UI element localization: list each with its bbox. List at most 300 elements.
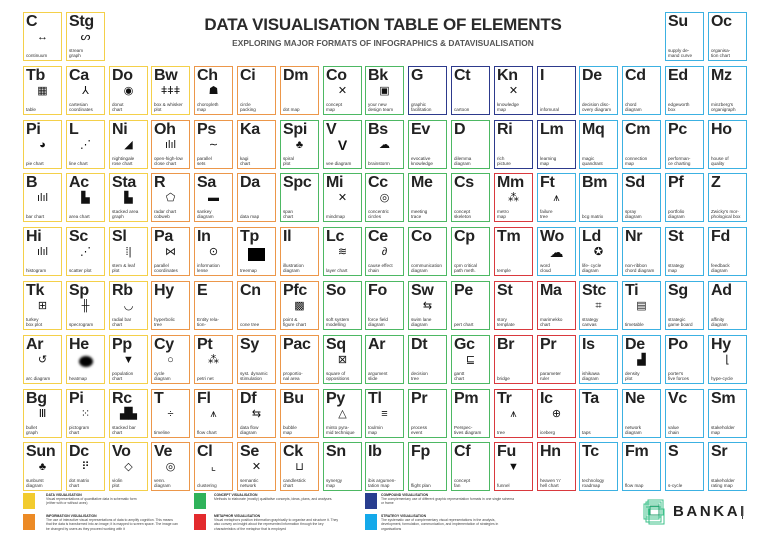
cell: Z <box>708 173 747 222</box>
cell: Sta: graph <box>112 214 124 219</box>
cell: Cn <box>237 281 276 330</box>
cell: Sr: Sr <box>711 443 727 460</box>
cell: Cn: cone tree <box>240 322 259 327</box>
cell: G <box>408 66 447 115</box>
cell: Sm: map <box>711 430 720 435</box>
cell: Fl: flow chart <box>197 430 217 435</box>
cell: Cf: Cf <box>454 443 470 460</box>
legend: strategy: development, formulation, communication, and implementation of strategies in <box>381 522 498 526</box>
cell: Bs: ☁ <box>379 139 390 151</box>
cell: Ic <box>537 389 576 438</box>
cell: Pfc: point & <box>283 317 297 322</box>
cell: Hy2 <box>708 335 747 384</box>
cell: Ta: taps <box>582 430 591 435</box>
cell: Ct: cartoon <box>454 107 469 112</box>
cell: T <box>151 389 190 438</box>
cell: Ma: marimekko <box>540 317 562 322</box>
cell: R <box>151 173 190 222</box>
cell: Df <box>237 389 276 438</box>
cell: Ad <box>708 281 747 330</box>
cell: Me: Me <box>411 174 433 191</box>
cell: Ta: Ta <box>582 390 599 407</box>
cell: Pt: ⁂ <box>208 354 219 366</box>
cell: Ar <box>23 335 62 384</box>
cell: Z: phological box <box>711 214 740 219</box>
cell: Bu: bubble <box>283 425 297 430</box>
cell: Hi: ılıl <box>37 246 48 258</box>
legend: compound <box>365 493 514 509</box>
cell: Co: concept <box>326 102 342 107</box>
cell: So <box>323 281 362 330</box>
cell: Ka: kagi <box>240 156 248 161</box>
cell: Df: Df <box>240 390 256 407</box>
cell: Ft: tree <box>540 214 548 219</box>
cell: S: s-cycle <box>668 483 682 488</box>
cell: Z: Z <box>711 174 720 191</box>
cell: Pfc: figure chart <box>283 322 306 327</box>
cell: Ne <box>622 389 661 438</box>
cell: Kn: ✕ <box>509 85 518 97</box>
cell: Wo: word <box>540 263 550 268</box>
cell: Dc: chart <box>69 483 79 488</box>
cell: Wo: cloud <box>540 268 551 273</box>
legend: data: DATA VISUALISATION <box>46 493 82 497</box>
cell: Ri: rich <box>497 156 504 161</box>
cell: Co: Co <box>326 67 347 84</box>
cell: St2: template <box>497 322 515 327</box>
cell: Pa: parallel <box>154 263 169 268</box>
cell: Sw: swim lane <box>411 317 431 322</box>
cell: Ci <box>237 66 276 115</box>
cell: Se: Se <box>240 443 259 460</box>
cell: Mz: organigraph <box>711 107 736 112</box>
cell: Da: data map <box>240 214 259 219</box>
cell: Dc: Dc <box>69 443 89 460</box>
cell: Pi: Pi <box>26 121 41 138</box>
cell: C: ↔ <box>37 31 48 43</box>
cell: St2: St <box>497 282 512 299</box>
cell: Ib: ibis argumen- <box>368 478 396 483</box>
cell: Ma: Ma <box>540 282 562 299</box>
cell: Sun: sunburst <box>26 478 44 483</box>
cell: He: He <box>69 336 89 353</box>
cell: Sl: Sl <box>112 228 127 245</box>
cell: Stg: Stg <box>69 13 94 30</box>
cell: Sc: ⋰ <box>80 246 91 258</box>
cell: Po: five forces <box>668 376 689 381</box>
cell: Ch: choropleth <box>197 102 218 107</box>
cell: Ni <box>109 120 148 169</box>
cell: Lm: map <box>540 161 549 166</box>
cell: Sc: Sc <box>69 228 88 245</box>
cell: Ck: Ck <box>283 443 303 460</box>
cell: Stg: ᔕ <box>81 31 90 43</box>
cell: Hy2: Hy <box>711 336 731 353</box>
cell: Tb <box>23 66 62 115</box>
cell: Pt <box>194 335 233 384</box>
cell: Sm <box>708 389 747 438</box>
cell: Dt <box>408 335 447 384</box>
cell: Mi: mindmap <box>326 214 345 219</box>
cell: Pac: nal area <box>283 376 300 381</box>
cell: Pi <box>23 120 62 169</box>
cell: Sta: Sta <box>112 174 136 191</box>
cell: Pi2: pictogram <box>69 425 89 430</box>
cell: Cy: ○ <box>167 354 174 366</box>
cell: Me: meeting <box>411 209 427 214</box>
cell: Cc: concentric <box>368 209 389 214</box>
cell: Tr: ⩚ <box>510 408 517 420</box>
cell: Spi: ♣ <box>296 139 303 151</box>
cell: Ac <box>66 173 105 222</box>
cell: Pf: portfolio <box>668 209 684 214</box>
cell: Hy: Hy <box>154 282 174 299</box>
cell: Fl <box>194 389 233 438</box>
cell: In <box>194 227 233 276</box>
cell: B: B <box>26 174 37 191</box>
cell: Oc <box>708 12 747 61</box>
cell: Spc <box>280 173 319 222</box>
cell: Ve: ◎ <box>166 461 175 473</box>
cell: Ic: Ic <box>540 390 553 407</box>
cell: E: tion- <box>197 322 206 327</box>
cell: Su <box>665 12 704 61</box>
cell: Tk: ⊞ <box>38 300 47 312</box>
cell: Ti: timetable <box>625 322 644 327</box>
legend: metaphor: METAPHOR VISUALISATION <box>214 514 260 518</box>
cell: L: L <box>69 121 78 138</box>
cell: Is: diagram <box>582 376 599 381</box>
cell: Cc: Cc <box>368 174 388 191</box>
cell: Fd: feedback <box>711 263 730 268</box>
cell: Fm <box>622 442 661 491</box>
cell: Br: bridge <box>497 376 510 381</box>
cell: Bk: your new <box>368 102 387 107</box>
cell: Ve: venn. <box>154 478 165 483</box>
legend: data: Visual representations of quantitative data in schematic form <box>46 497 137 501</box>
cell: E: Entity rela- <box>197 317 219 322</box>
cell: Pac: proportio- <box>283 371 303 376</box>
cell: Nr: chord diagram <box>625 268 654 273</box>
cell: Mm <box>494 173 533 222</box>
cell: Ev <box>408 120 447 169</box>
cell: St <box>665 227 704 276</box>
cell: Su: Su <box>668 13 688 30</box>
cell: Ev: knowledge <box>411 161 433 166</box>
cell: Ct: Ct <box>454 67 470 84</box>
cell: Oc: tion chart <box>711 53 730 58</box>
cell: Mz <box>708 66 747 115</box>
cell: Rb: radial bar <box>112 317 131 322</box>
cell: Bg: bullet <box>26 425 37 430</box>
cell: V: V <box>326 121 336 138</box>
cell: Da <box>237 173 276 222</box>
cell: De: overy diagram <box>582 107 611 112</box>
cell: Ve: diagram <box>154 483 171 488</box>
cell: Ar: arc diagram <box>26 376 50 381</box>
cell: Rb: chart <box>112 322 122 327</box>
cell: Pi: ◕ <box>39 139 46 151</box>
cell: D: dilemma <box>454 156 471 161</box>
cell: Fl: Fl <box>197 390 211 407</box>
cell: Ic: iceberg <box>540 430 555 435</box>
cell: Cs <box>451 173 490 222</box>
cell: Pc <box>665 120 704 169</box>
cell: Pa <box>151 227 190 276</box>
cell: Il <box>280 227 319 276</box>
cell: Sq: oppositions <box>326 376 349 381</box>
cell: Kn: knowledge <box>497 102 519 107</box>
cell: Cn: Cn <box>240 282 261 299</box>
cell: Stc: canvas <box>582 322 597 327</box>
cell: Tl: ≡ <box>381 408 388 420</box>
cell: Tp: treemap <box>240 268 257 273</box>
cell: Bw: Bw <box>154 67 177 84</box>
cell: Co2: diagram <box>411 268 428 273</box>
legend: information: INFORMATION VISUALISATION <box>46 514 97 518</box>
cell: Sa: ▬ <box>208 192 219 204</box>
cell: Do: ◉ <box>124 85 133 97</box>
cell: Tk <box>23 281 62 330</box>
cell: Ka: chart <box>240 161 250 166</box>
cell: Ch <box>194 66 233 115</box>
cell: Ac: area chart <box>69 214 90 219</box>
cell: Do: donut <box>112 102 124 107</box>
cell: Sw <box>408 281 447 330</box>
cell: Rc: ▟▙ <box>120 408 137 420</box>
cell: Vo: plot <box>112 483 119 488</box>
cell: S <box>665 442 704 491</box>
cell: Cl <box>194 442 233 491</box>
cell: Ta <box>579 389 618 438</box>
cell: Vo: violin <box>112 478 122 483</box>
legend: metaphor: characteristics of the metaphor that is employed <box>214 527 286 531</box>
cell: Gc <box>451 335 490 384</box>
cell: Cm: connection <box>625 156 647 161</box>
cell: Dm: dot map <box>283 107 300 112</box>
cell: D <box>451 120 490 169</box>
cell: Bg <box>23 389 62 438</box>
cell: G: facilitation <box>411 107 431 112</box>
cell: Sa <box>194 173 233 222</box>
cell: Ck: chart <box>283 483 293 488</box>
cell: Co2 <box>408 227 447 276</box>
cell: Gc: Gc <box>454 336 475 353</box>
cell: Sr: rating map <box>711 483 733 488</box>
cell: Do: Do <box>112 67 133 84</box>
cell: Fd <box>708 227 747 276</box>
cell: Tb: ▦ <box>37 85 48 97</box>
cell: Cd: chord <box>625 102 636 107</box>
cell: Ce: chain <box>368 268 379 273</box>
cell: Ve: Ve <box>154 443 172 460</box>
cell: V <box>323 120 362 169</box>
cell: C: C <box>26 13 37 30</box>
cell: Fu: ▼ <box>508 461 519 473</box>
cell: Tm: temple <box>497 268 511 273</box>
cell: L <box>66 120 105 169</box>
cell: In: ⊙ <box>209 246 218 258</box>
cell: Rc: chart <box>112 430 122 435</box>
cell: Sr: stakeholder <box>711 478 735 483</box>
cell: Mq: quandrant <box>582 161 603 166</box>
cell: Pfc <box>280 281 319 330</box>
cell: Ka <box>237 120 276 169</box>
legend: information <box>23 514 178 531</box>
cell: Oh: close chart <box>154 161 176 166</box>
cell: Vo <box>109 442 148 491</box>
cell: Ev: evocative <box>411 156 430 161</box>
cell: Pc: performan- <box>668 156 690 161</box>
cell: Cd <box>622 66 661 115</box>
cell: Wo <box>537 227 576 276</box>
cell: Bk: Bk <box>368 67 388 84</box>
legend: data <box>23 493 137 509</box>
cell: G: graphic <box>411 102 426 107</box>
cell: Tl <box>365 389 404 438</box>
legend: strategy: The systematic use of complementary visual representations in the analysis, <box>381 518 495 522</box>
cell: Wo: Wo <box>540 228 564 245</box>
cell: Is: Is <box>582 336 595 353</box>
cell: Bg: Bg <box>26 390 47 407</box>
cell: Pf: Pf <box>668 174 683 191</box>
cell: R: radar chart <box>154 209 176 214</box>
cell: Ar2: Ar <box>368 336 385 353</box>
cell: Se: network <box>240 483 256 488</box>
cell: Ed: box <box>668 107 675 112</box>
cell: Sd: diagram <box>625 214 642 219</box>
cell: Sm: stakeholder <box>711 425 735 430</box>
cell: Cf: concept <box>454 478 470 483</box>
cell: Sr <box>708 442 747 491</box>
cell: Pr2: process <box>411 425 427 430</box>
cell: Ce: Ce <box>368 228 388 245</box>
cell: Wo: ☁ <box>550 244 564 260</box>
cell: Nr: non-ribbon <box>625 263 647 268</box>
cell: Br <box>494 335 533 384</box>
cell: In: In <box>197 228 211 245</box>
cell: T: ÷ <box>167 408 174 420</box>
cell: Sg <box>665 281 704 330</box>
cell: Lc: ≋ <box>338 246 347 258</box>
cell: Tp <box>237 227 276 276</box>
cell: He: heatmap <box>69 376 87 381</box>
cell: Pa: ⋈ <box>165 246 176 258</box>
cell: Ne: network <box>625 425 641 430</box>
cell: Ca: cartesian <box>69 102 88 107</box>
cell: Df: diagram <box>240 430 257 435</box>
cell: Ft: ⩚ <box>553 192 560 204</box>
cell: Bk: ▣ <box>379 85 390 97</box>
cell: Rb <box>109 281 148 330</box>
cell: Sw: diagram <box>411 322 428 327</box>
cell: Ch: map <box>197 107 206 112</box>
legend: compound: COMPOUND VISUALISATION <box>381 493 428 497</box>
cell: Sy: stimulation <box>240 376 262 381</box>
cell: Hy: hyperbolic <box>154 317 175 322</box>
cell: Mq <box>579 120 618 169</box>
cell: Sq <box>323 335 362 384</box>
cell: V: vee diagram <box>326 161 351 166</box>
legend: concept <box>194 493 332 509</box>
cell: Nr: Nr <box>625 228 642 245</box>
cell: Ho <box>708 120 747 169</box>
cell: Rb: ◡ <box>124 300 133 312</box>
cell: Hy2: ⌊ <box>725 354 730 366</box>
cell: Ps <box>194 120 233 169</box>
cell: Ev: Ev <box>411 121 430 138</box>
cell: Co <box>323 66 362 115</box>
legend: data: (either with or without axes) <box>46 501 87 505</box>
cell: Oh: open-high-low <box>154 156 183 161</box>
cell: St: map <box>668 268 677 273</box>
cell: Pr <box>537 335 576 384</box>
cell: Ti: ▤ <box>636 300 647 312</box>
legend: metaphor: also convey an insight about the represented information through the key <box>214 522 324 526</box>
cell: Stc: ⌗ <box>595 300 602 312</box>
cell: Gc: gantt <box>454 371 464 376</box>
cell: Bw <box>151 66 190 115</box>
cell: Pi2: ⁙ <box>81 408 90 420</box>
legend: compound: The complementary use of different graphic representation formats in one single schema <box>381 497 514 501</box>
cell: Stc: strategy <box>582 317 598 322</box>
cell: Vc: value <box>668 425 679 430</box>
legend: compound: or frame <box>381 501 394 505</box>
cell: Oh <box>151 120 190 169</box>
cell: Df: data flow <box>240 425 258 430</box>
cell: Tm: Tm <box>497 228 520 245</box>
cell: Mm: metro <box>497 209 509 214</box>
cell: Sc: scatter plot <box>69 268 91 273</box>
cell: Is <box>579 335 618 384</box>
cell: Bg: Ⅲ <box>39 408 46 420</box>
cell: Sg: game board <box>668 322 693 327</box>
cell: Ce: ∂ <box>382 246 387 258</box>
cell: Mi <box>323 173 362 222</box>
cell: Spi: spiral <box>283 156 294 161</box>
cell: Ac: Ac <box>69 174 89 191</box>
cell: Ld: Ld <box>582 228 601 245</box>
cell: Hn: Hn <box>540 443 561 460</box>
cell: De <box>579 66 618 115</box>
cell: Sun: Sun <box>26 443 55 460</box>
cell: Sp: specrogram <box>69 322 93 327</box>
cell: Lc: Lc <box>326 228 344 245</box>
cell: B: bar chart <box>26 214 44 219</box>
cell: Spc: chart <box>283 214 293 219</box>
cell: Sl: plot <box>112 268 119 273</box>
cell: Ni: ◢ <box>124 139 133 151</box>
cell: Pe <box>451 281 490 330</box>
cell: Oh: Oh <box>154 121 176 138</box>
cell: Bu: map <box>283 430 292 435</box>
cell: Cp: cpm critical <box>454 263 477 268</box>
cell: Mi: Mi <box>326 174 343 191</box>
cell: De2: density <box>625 371 640 376</box>
cell: Cs: concept <box>454 209 470 214</box>
legend: information: be changed by users as they proceed working with it <box>46 527 125 531</box>
cell: R: cobweb <box>154 214 170 219</box>
cell: Sw: Sw <box>411 282 434 299</box>
cell: T: T <box>154 390 163 407</box>
cell: Ft: Ft <box>540 174 555 191</box>
cell: Do <box>109 66 148 115</box>
cell: Vc: Vc <box>668 390 687 407</box>
cell: Fp <box>408 442 447 491</box>
cell: Mi: ✕ <box>338 192 347 204</box>
cell: Ka: Ka <box>240 121 260 138</box>
cell: Bw: ǂǂǂ <box>161 85 180 97</box>
